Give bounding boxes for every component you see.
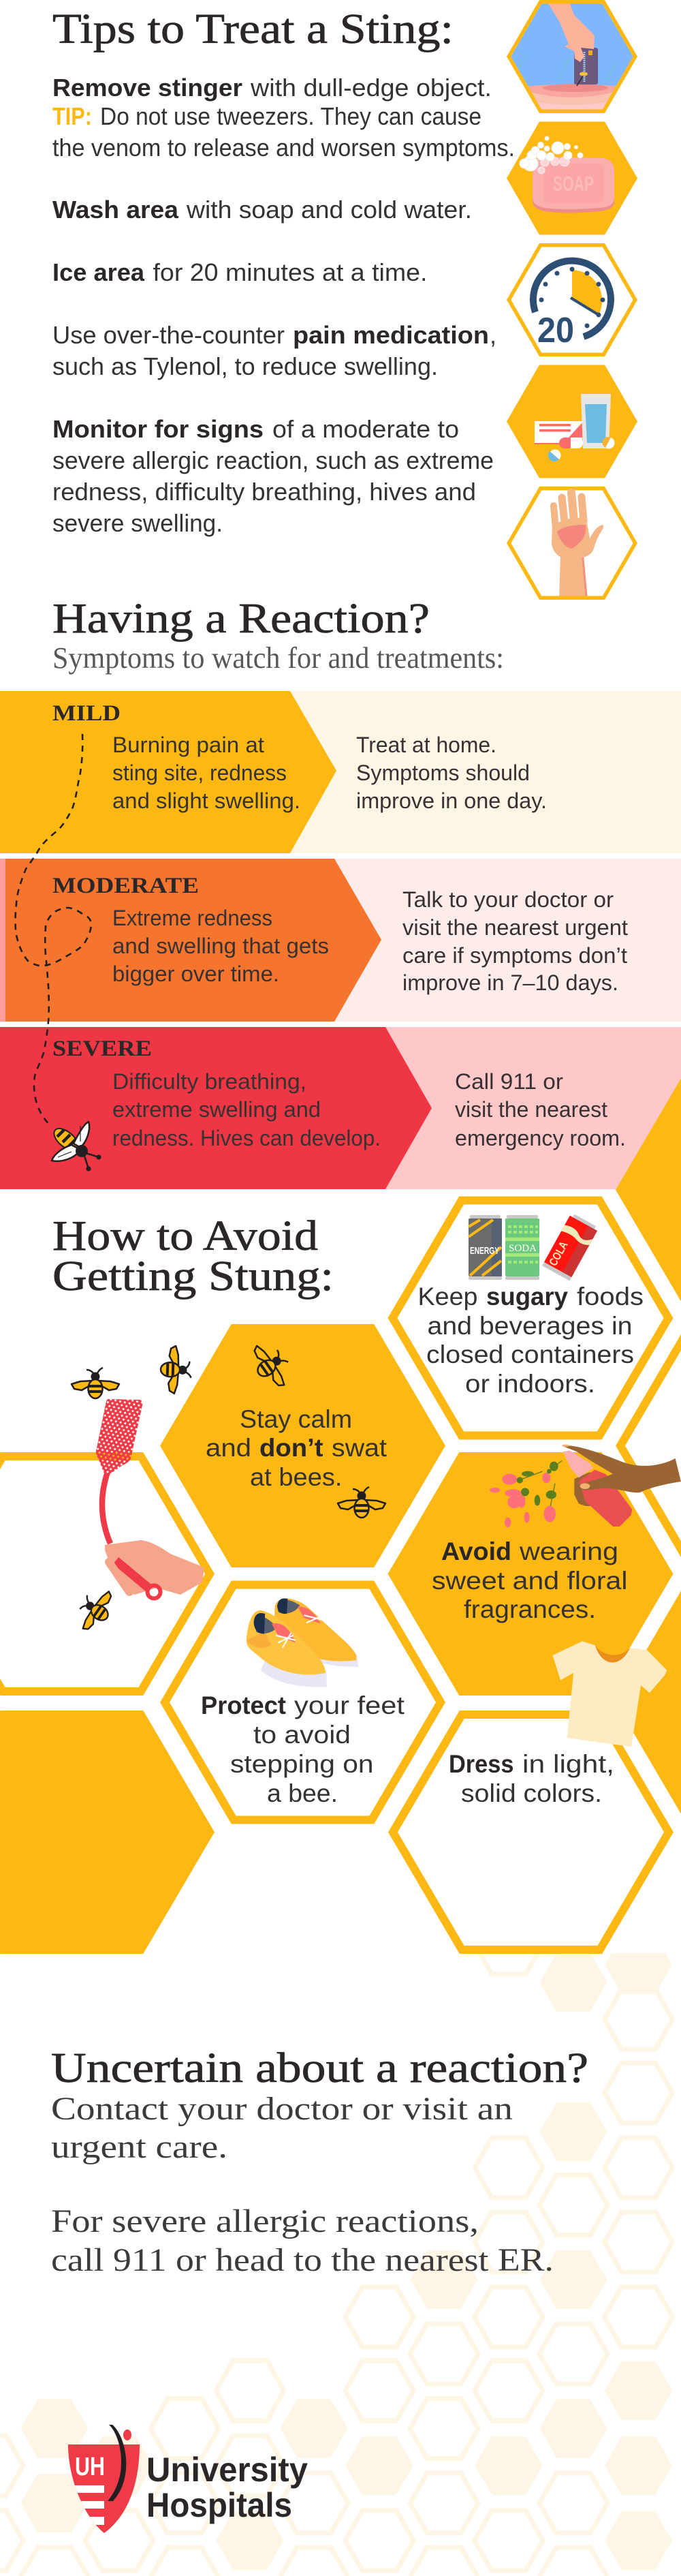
panel: mild [0, 691, 681, 853]
mild treatment: improve in one day. [356, 788, 547, 813]
text block: uncertain about a reaction: call 911 or head to the nearest ER. [51, 2242, 554, 2278]
mild symptoms: Burning pain at [112, 733, 264, 757]
mild symptoms: sting site, redness [112, 761, 287, 785]
moderate symptoms: and swelling that gets [112, 934, 329, 958]
text block: uncertain about a reaction: Uncertain about a reaction? [51, 2045, 588, 2091]
icon: energy can [469, 1215, 502, 1280]
icon: bee bottom of hexagon [338, 1487, 385, 1518]
moderate treatment: Talk to your doctor or [402, 887, 614, 912]
severe symptoms: redness. Hives can develop. [112, 1126, 381, 1150]
severe symptoms: Difficulty breathing, [112, 1069, 306, 1094]
panel: moderate [0, 859, 681, 1022]
icon: fly swatter in hand [96, 1399, 204, 1599]
hexagon: stay calm: don’t [259, 1434, 323, 1462]
hexagon: protect your feet [160, 1581, 445, 1824]
icon: bee upper left of swatter [72, 1368, 119, 1398]
moderate treatment: improve in 7–10 days. [402, 970, 618, 995]
tip: monitor for signs: of a moderate to [272, 415, 459, 443]
title: Tips to Treat a Sting: Tips to Treat a Sting: [52, 6, 454, 52]
mild treatment: Treat at home. [356, 733, 496, 757]
right honeycomb edge: solid hexagon [616, 1069, 681, 1311]
mild treatment [356, 733, 547, 813]
tip: ice area: Ice area [52, 258, 145, 286]
hexagon: keep sugary foods: closed containers [426, 1340, 634, 1368]
logo: University Hospitals: Hospitals [146, 2486, 292, 2524]
icon: 20 minute clock [507, 243, 637, 356]
text block: uncertain about a reaction: urgent care. [51, 2129, 227, 2165]
icon: bee lower left [70, 1582, 120, 1636]
tip: monitor for signs: Monitor for signs [52, 415, 264, 443]
logo: University Hospitals [68, 2425, 308, 2533]
heading: How to Avoid Getting Stung: Getting Stung: [52, 1253, 334, 1300]
text block: treatment tips [52, 74, 515, 537]
tip: pain medication: such as Tylenol, to reduce swelling. [52, 352, 438, 380]
icon: t-shirt [553, 1641, 667, 1747]
icon: hand with rash [507, 487, 637, 600]
text block: uncertain about a reaction: Contact your doctor or visit an [51, 2091, 513, 2127]
mild symptoms [112, 733, 300, 813]
background: pale honeycomb pattern [0, 1912, 676, 2576]
tip: remove stinger: the venom to release and worsen symptoms. [52, 134, 515, 162]
moderate treatment [402, 887, 628, 995]
icon: bee at end of flight path [50, 1122, 101, 1171]
hexagon: keep sugary foods: sugary [486, 1283, 568, 1310]
subheading: symptoms and treatments: Symptoms to watch for and treatments: [52, 641, 504, 675]
hexagon: stay calm: Stay calm [240, 1405, 352, 1433]
hexagon: avoid sweet fragrances [388, 1452, 673, 1696]
severe symptoms [112, 1069, 381, 1150]
right honeycomb edge: lower solid hexagon [616, 1581, 681, 1824]
icon: cola can: COLA [547, 1239, 571, 1268]
hexagon: stay calm [160, 1324, 445, 1567]
hexagon: dress in light colors: Dress [449, 1750, 513, 1778]
heading: How to Avoid Getting Stung [52, 1213, 334, 1300]
hexagon: protect your feet: to avoid [253, 1721, 351, 1749]
severe treatment: Call 911 or [455, 1069, 563, 1094]
tip: monitor for signs [52, 415, 494, 537]
tip: pain medication: pain medication [293, 321, 489, 349]
moderate treatment: visit the nearest urgent [402, 915, 628, 940]
hexagon: dress in light colors [388, 1711, 674, 1954]
tip: monitor for signs: redness, difficulty breathing, hives and [52, 478, 476, 506]
hexagon: stay calm: swat [332, 1434, 387, 1462]
right honeycomb edge: outlined hexagon [616, 1324, 681, 1567]
icon: bee right of swatter [160, 1345, 192, 1394]
icon: pair of sneakers [247, 1598, 358, 1687]
severe treatment: visit the nearest [455, 1097, 607, 1122]
hexagon: avoid sweet fragrances: wearing [519, 1537, 618, 1565]
logo: University Hospitals: University [146, 2451, 308, 2489]
tip: monitor for signs: severe swelling. [52, 509, 223, 537]
hexagon: stay calm: at bees. [250, 1463, 342, 1491]
dashed bee flight path [15, 734, 91, 1125]
panel: severe [0, 1027, 681, 1189]
icon: bee top of hexagon [245, 1336, 298, 1393]
tip: ice area: for 20 minutes at a time. [153, 258, 428, 286]
hexagon: stay calm: and [206, 1434, 251, 1462]
tip: pain medication [52, 321, 496, 380]
icon: soda can [505, 1215, 539, 1280]
hexagon: solid lower left [0, 1711, 215, 1954]
moderate symptoms [112, 906, 329, 986]
hexagon: avoid sweet fragrances: fragrances. [464, 1595, 596, 1623]
hexagon: keep sugary foods: or indoors. [465, 1370, 595, 1398]
tip: pain medication: Use over-the-counter [52, 321, 285, 349]
icon: soap bar with bubbles [507, 121, 637, 234]
hexagon: dress in light colors: in light, [522, 1750, 614, 1778]
tip: remove stinger: TIP: [52, 102, 92, 130]
tip: remove stinger: Remove stinger [52, 74, 242, 102]
moderate treatment: care if symptoms don’t [402, 943, 627, 968]
tip: monitor for signs: severe allergic reaction, such as extreme [52, 446, 494, 474]
text block: uncertain about a reaction: For severe allergic reactions, [51, 2203, 479, 2239]
panel: moderate: MODERATE [52, 874, 199, 898]
moderate symptoms: Extreme redness [112, 906, 272, 930]
hexagon: keep sugary foods: Keep [418, 1283, 478, 1310]
icon: 20 minute clock: 20 [537, 311, 574, 350]
icon: perfume spray in hand with flowers [490, 1445, 681, 1527]
icon: soap bar with bubbles: SOAP [553, 172, 594, 196]
icon: cola can [542, 1212, 599, 1281]
panel: severe: SEVERE [52, 1037, 152, 1061]
icon: hand removing stinger with card [507, 0, 637, 116]
hexagon: avoid sweet fragrances: sweet and floral [432, 1567, 628, 1595]
hexagon: protect your feet: Protect [201, 1691, 286, 1719]
hexagon: keep sugary foods: foods [577, 1283, 644, 1310]
hexagon: protect your feet: a bee. [267, 1779, 338, 1807]
heading: Having a Reaction: Having a Reaction? [52, 596, 430, 642]
logo: University Hospitals: UH [75, 2453, 105, 2481]
hexagon: protect your feet: stepping on [230, 1750, 373, 1778]
hexagon: keep sugary foods: and beverages in [428, 1312, 632, 1340]
icon: pain medication and glass of water [507, 365, 637, 478]
icon: energy can: ENERGY [470, 1245, 499, 1257]
hexagon: protect your feet: your feet [294, 1691, 405, 1719]
tip: remove stinger [52, 74, 515, 162]
severe treatment [455, 1069, 626, 1150]
tip: wash area [52, 196, 472, 224]
tip: wash area: with soap and cold water. [186, 196, 472, 224]
hexagon: swatter frame [0, 1452, 215, 1696]
tip: pain medication: , [490, 321, 496, 349]
hexagon: keep sugary foods [388, 1197, 673, 1439]
hexagon: avoid sweet fragrances: Avoid [441, 1537, 511, 1565]
moderate symptoms: bigger over time. [112, 962, 279, 986]
heading: How to Avoid Getting Stung: How to Avoid [52, 1213, 318, 1259]
panel: mild: MILD [52, 701, 121, 726]
tip: wash area: Wash area [52, 196, 179, 224]
tip: remove stinger: with dull-edge object. [250, 74, 492, 102]
icon: soda can: SODA [509, 1243, 537, 1254]
text block: uncertain about a reaction [51, 2045, 588, 2278]
hexagon: dress in light colors: solid colors. [461, 1779, 602, 1807]
tip: remove stinger: Do not use tweezers. They can cause [100, 102, 481, 130]
severe symptoms: extreme swelling and [112, 1097, 321, 1122]
mild symptoms: and slight swelling. [112, 788, 300, 813]
severe treatment: emergency room. [455, 1126, 626, 1150]
mild treatment: Symptoms should [356, 761, 530, 785]
